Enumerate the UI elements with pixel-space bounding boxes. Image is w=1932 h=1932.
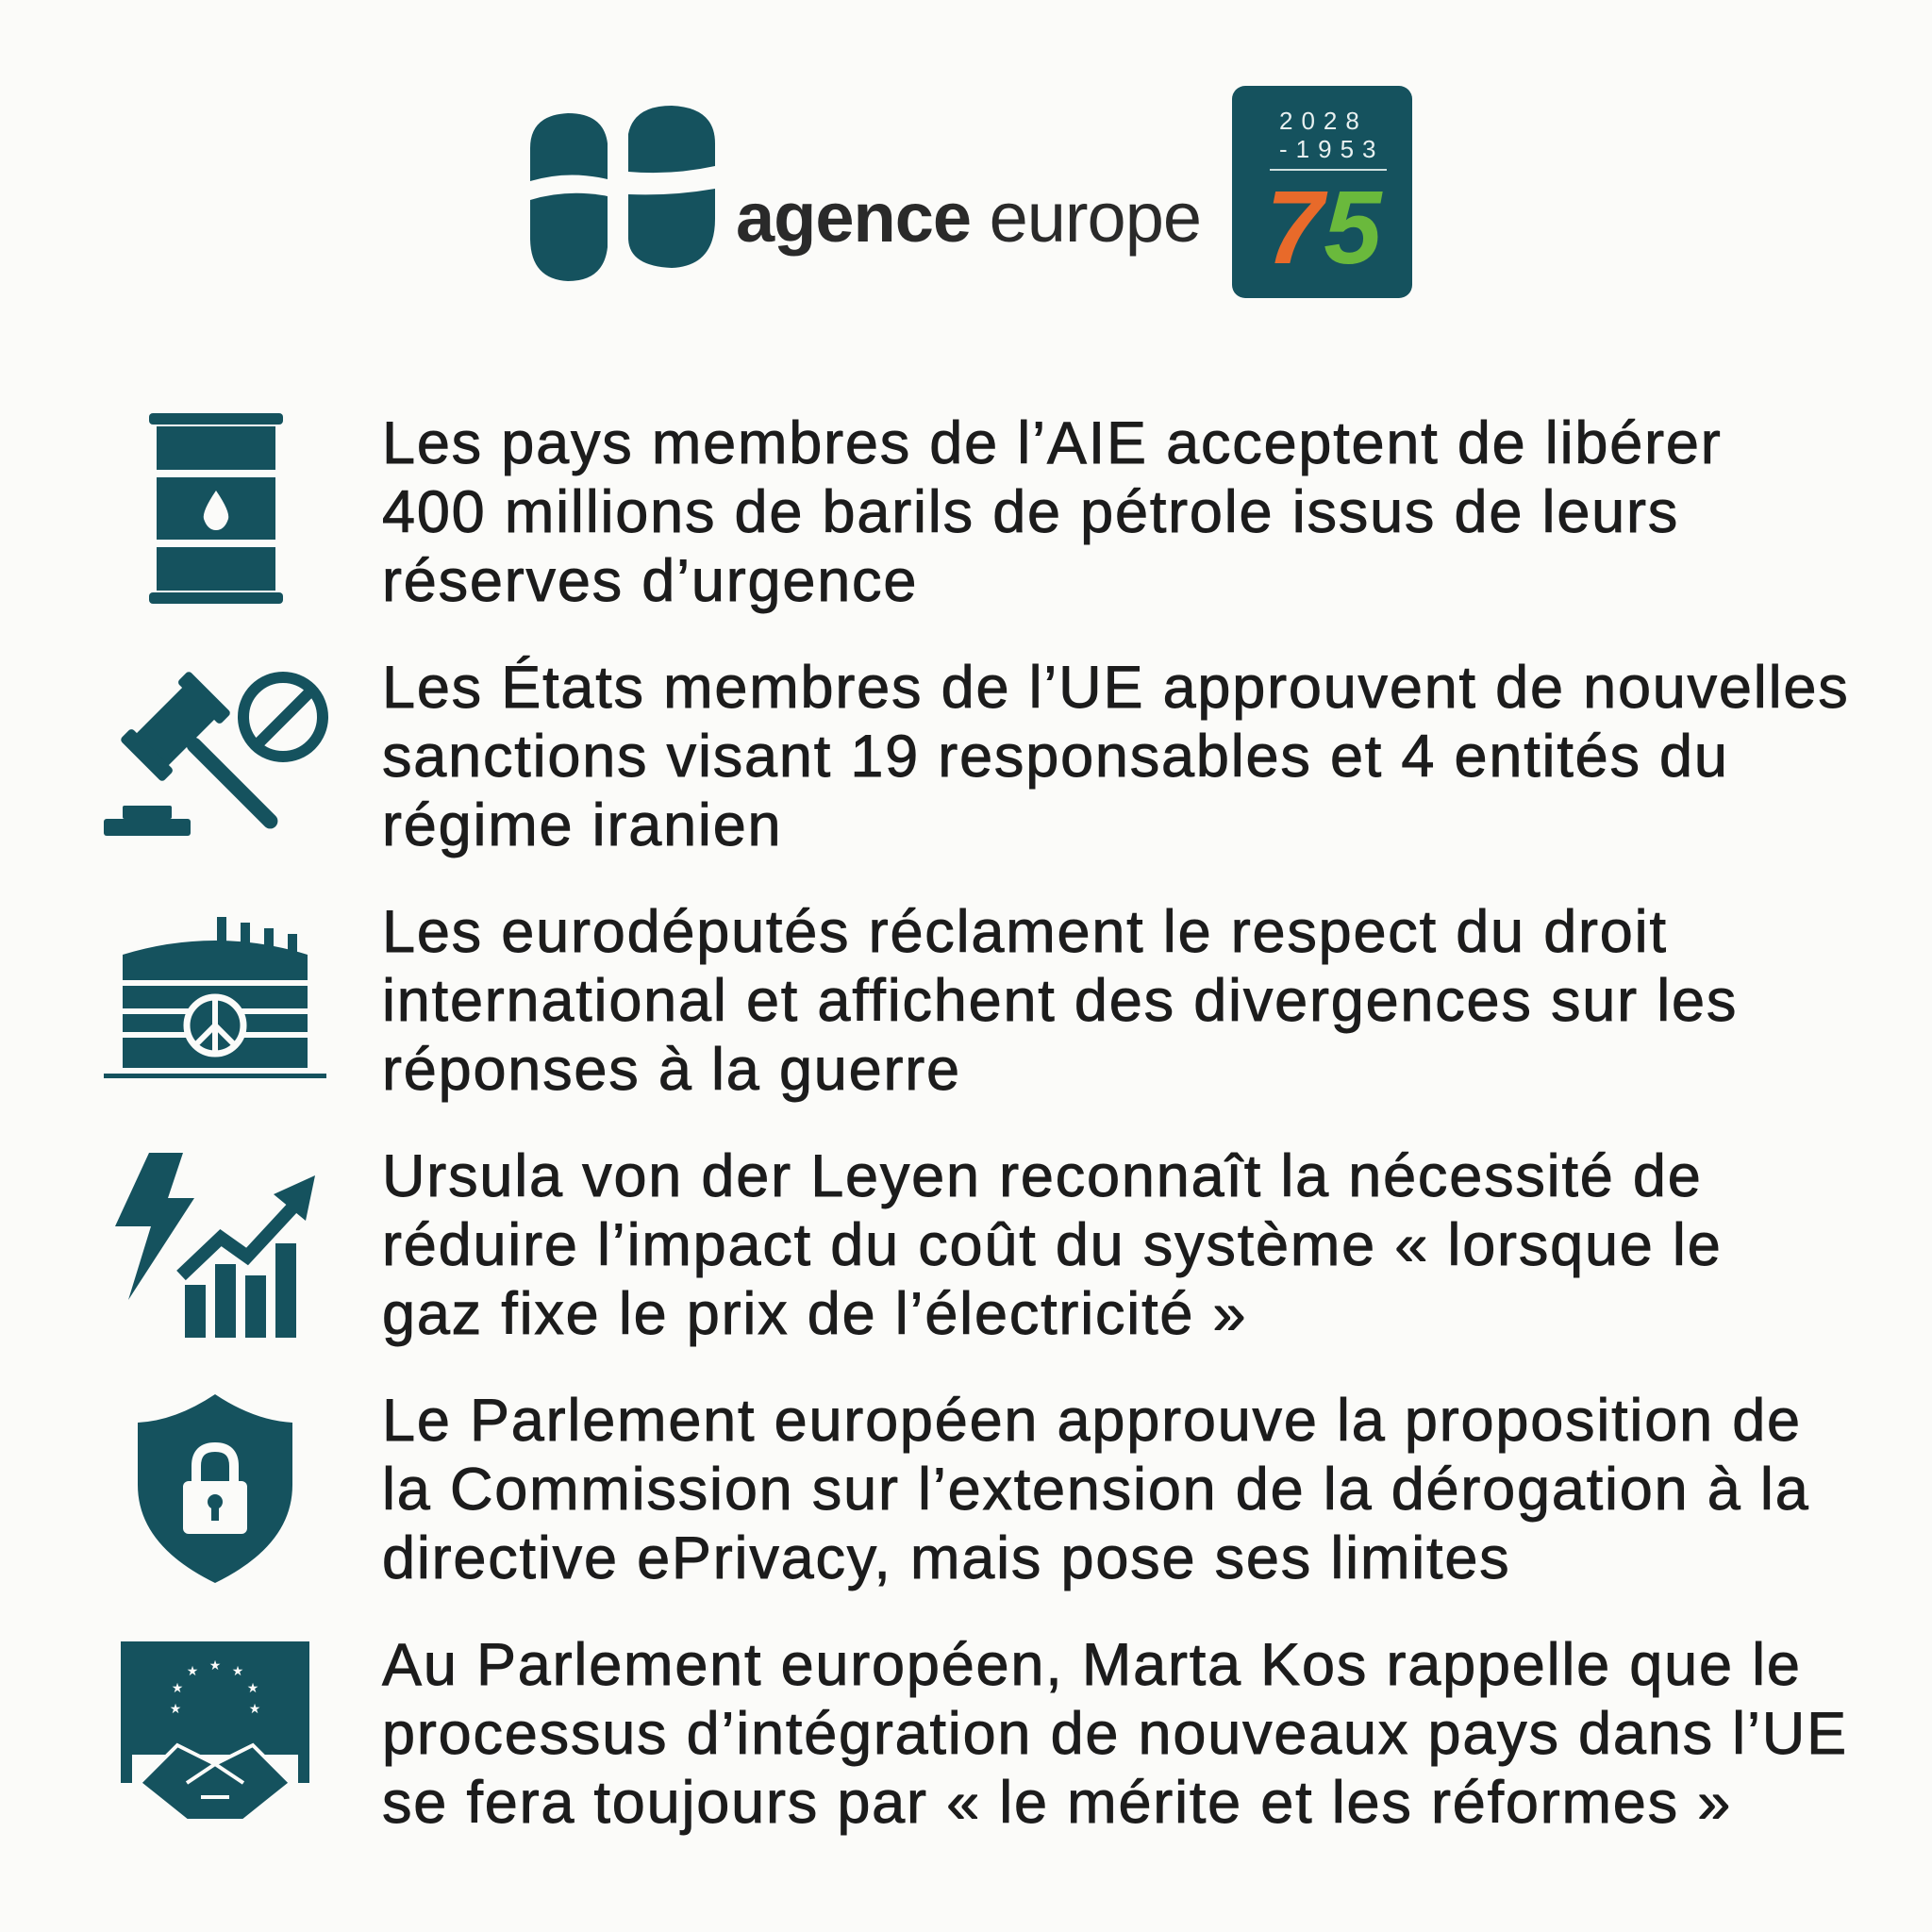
badge: 75 years: 2028 (1279, 107, 1368, 135)
icon: EU flag handshake: ★ (247, 1680, 258, 1695)
icon: logo symbol (530, 106, 715, 281)
row 1 text: 400 millions de barils de pétrole issus de leurs (382, 479, 1679, 545)
icon: shield with lock (138, 1394, 292, 1583)
row 4 text: réduire l’impact du coût du système « lorsque le (382, 1212, 1723, 1278)
icon: EU flag handshake: ★ (232, 1663, 243, 1678)
row 2 text: sanctions visant 19 responsables et 4 entités du (382, 724, 1729, 790)
row 4 text: Ursula von der Leyen reconnaît la nécessité de (382, 1143, 1703, 1209)
text: agence europe: agence europe (736, 178, 1201, 257)
row 2 text (382, 655, 1850, 858)
icon: oil barrel (149, 413, 283, 604)
row 5 text: Le Parlement européen approuve la proposition de (382, 1388, 1802, 1454)
badge: 75 years (1232, 86, 1412, 298)
icon: EU flag handshake: ★ (249, 1701, 260, 1716)
icon: EU flag handshake: ★ (187, 1663, 198, 1678)
icon: EU flag handshake: ★ (209, 1657, 221, 1673)
row 3 text: réponses à la guerre (382, 1037, 961, 1103)
icon: parliament with peace sign (104, 917, 326, 1078)
row 1 text (382, 410, 1722, 614)
row 3 text: international et affichent des divergences sur les (382, 968, 1738, 1034)
badge: 75 years: -1953 (1279, 135, 1385, 163)
row 5 text (382, 1388, 1810, 1591)
row 6 text: se fera toujours par « le mérite et les réformes » (382, 1770, 1732, 1836)
icon: gavel and prohibition (104, 672, 328, 836)
row 6 text (381, 1632, 1848, 1836)
row 1 text: Les pays membres de l’AIE acceptent de libérer (382, 410, 1722, 476)
row 6 text: Au Parlement européen, Marta Kos rappelle que le (382, 1632, 1802, 1698)
row 5 text: directive ePrivacy, mais pose ses limites (382, 1525, 1510, 1591)
row 5 text: la Commission sur l’extension de la dérogation à la (382, 1457, 1810, 1523)
row 4 text (382, 1143, 1723, 1347)
icon: lightning and rising chart (115, 1153, 315, 1338)
row 2 text: régime iranien (382, 792, 782, 858)
row 3 text (382, 899, 1738, 1103)
row 1 text: réserves d’urgence (382, 548, 918, 614)
row 3 text: Les eurodéputés réclament le respect du droit (382, 899, 1668, 965)
badge: 75 years: 75 (1266, 170, 1381, 286)
icon: EU flag handshake: ★ (172, 1680, 183, 1695)
icon: EU flag handshake (121, 1641, 309, 1819)
row 6 text: processus d’intégration de nouveaux pays dans l’UE (382, 1701, 1848, 1767)
logo: agence europe (530, 86, 1412, 298)
row 2 text: Les États membres de l’UE approuvent de nouvelles (382, 655, 1850, 721)
icon: EU flag handshake: ★ (170, 1701, 181, 1716)
row 4 text: gaz fixe le prix de l’électricité » (382, 1281, 1247, 1347)
